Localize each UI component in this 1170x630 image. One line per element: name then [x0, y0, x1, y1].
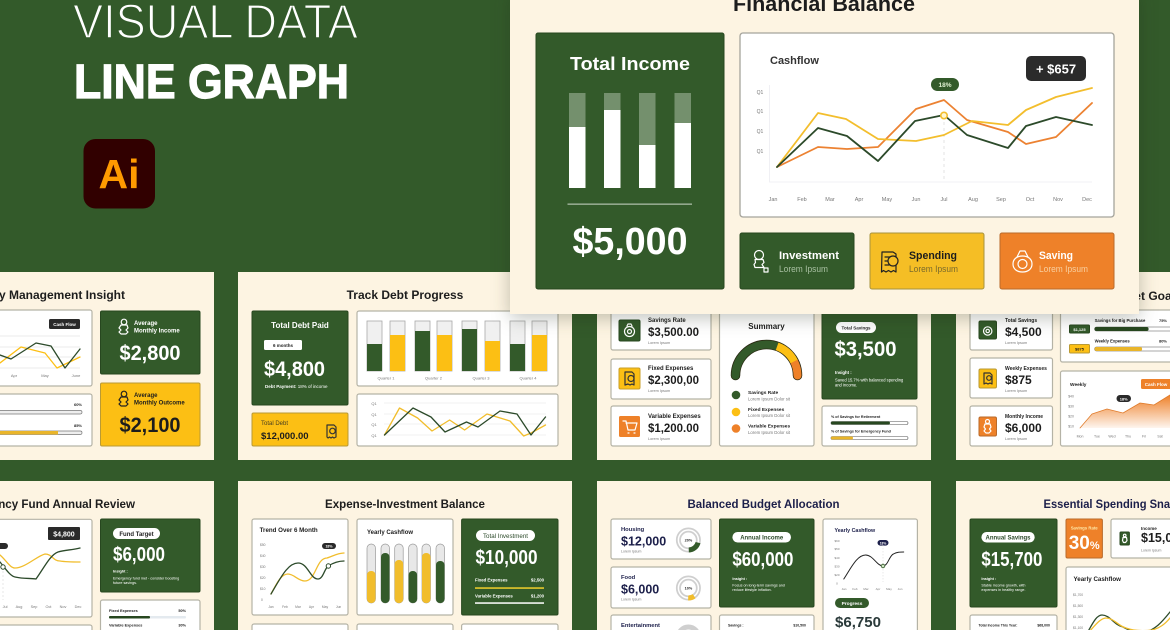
saving card	[1000, 233, 1114, 289]
savings card: Savings :	[728, 624, 744, 628]
gauge legend: Savings Rate	[748, 390, 778, 396]
variable expenses card: $1,200.00	[648, 421, 699, 435]
trend line chart card: $10	[260, 587, 266, 591]
average monthly income card	[100, 311, 200, 374]
monthly income card: Lorem Ipsum	[1005, 437, 1027, 441]
month labels: Sep	[996, 197, 1006, 203]
progress card	[0, 394, 92, 446]
total income card: $68,000	[1037, 624, 1050, 628]
housing card	[611, 519, 711, 559]
food card: 10%	[685, 586, 693, 590]
line chart card: May	[41, 373, 49, 378]
month labels: Jan	[769, 197, 777, 203]
total income card: Total Income	[570, 54, 690, 74]
gauge chart	[736, 344, 798, 376]
trend line chart card: Mar	[295, 605, 302, 609]
cashflow line chart card	[740, 33, 1114, 217]
housing card: $12,000	[621, 534, 666, 548]
food card	[611, 567, 711, 608]
trend line chart card: $20	[260, 576, 266, 580]
month labels: Jul	[940, 197, 948, 203]
area chart card: Thu	[1125, 434, 1131, 438]
total debt paid card: Total Debt Paid	[271, 321, 329, 330]
savings rate card: Savings Rate	[1071, 526, 1098, 530]
icon: saving	[1013, 251, 1032, 272]
average monthly income card: Monthly Income	[134, 328, 180, 334]
month labels: Feb	[797, 197, 807, 203]
goal progress card	[1060, 310, 1170, 362]
savings rate card	[611, 312, 711, 350]
total savings card: Total Savings	[842, 326, 871, 330]
investment card: Lorem Ipsum	[779, 264, 828, 274]
entertainment card: Entertainment	[621, 623, 660, 629]
yearly cashflow capsule bars: Yearly Cashflow	[367, 530, 413, 536]
fixed expenses card: Fixed Expenses	[648, 366, 694, 372]
annual income card	[720, 519, 814, 607]
gauge legend: Lorem Ipsum Dolor sit	[748, 430, 791, 435]
annual income card: Annual Income	[740, 536, 784, 542]
bar chart card: Quarter 3	[473, 376, 490, 380]
yearly cashflow and progress card: Yearly Cashflow	[834, 528, 876, 534]
fixed expenses card	[611, 359, 711, 399]
total savings card: and income.	[835, 382, 857, 388]
annual savings card: Annual Savings	[985, 536, 1031, 542]
chart lines	[777, 88, 1092, 167]
cashflow line chart card: Q1	[757, 90, 764, 96]
variable expenses card: Lorem Ipsum	[648, 437, 670, 441]
gauge legend: Lorem Ipsum Dolor sit	[748, 396, 791, 402]
goal progress card: 75%	[1159, 318, 1167, 323]
line chart card: Nov	[60, 605, 66, 609]
cashflow line chart card: Q1	[757, 149, 764, 155]
trend line chart card: $30	[260, 565, 266, 569]
total debt paid card: Debt Payment: 18% of income	[265, 384, 328, 389]
trend line chart card: 0	[261, 598, 263, 602]
yearly cashflow and progress card: Progress	[842, 601, 863, 607]
trend line chart card: Jun	[336, 605, 341, 609]
area chart card: Cash Flow	[1145, 382, 1168, 387]
savings card: $10,500	[793, 624, 806, 628]
value callout	[1026, 56, 1086, 81]
average monthly income card: Average	[134, 321, 158, 327]
trend line chart card: $40	[260, 554, 266, 558]
month labels: Nov	[1053, 197, 1063, 203]
investment card: Investment	[779, 250, 839, 262]
yearly cashflow chart card	[1066, 567, 1170, 630]
heading: Track Debt Progress	[347, 288, 464, 302]
fund target card: future savings.	[113, 581, 137, 585]
yearly cashflow and progress card: $60	[834, 539, 840, 543]
total savings card: Insight :	[835, 370, 852, 375]
icon: spending	[882, 252, 898, 272]
area chart card: 18%	[1120, 396, 1128, 401]
value callout: + $657	[1036, 62, 1076, 76]
total savings card: Lorem Ipsum	[1005, 341, 1027, 345]
area chart card: $40	[1068, 394, 1074, 398]
goal progress card: $875	[1075, 346, 1085, 352]
month labels: Mar	[825, 197, 835, 203]
line chart card: Sep	[31, 605, 37, 609]
food card: Food	[621, 575, 636, 581]
trend line chart card: Feb	[282, 605, 288, 609]
average monthly outcome card: $2,100	[120, 414, 180, 437]
goal progress card: $1,125	[1073, 327, 1086, 332]
area chart card: Wed	[1108, 434, 1116, 438]
average monthly outcome card: Monthly Outcome	[134, 400, 185, 406]
line chart card: Q1	[371, 412, 377, 417]
total debt paid card	[252, 311, 348, 405]
yearly cashflow and progress card: $50	[834, 547, 840, 551]
panel: track debt progress	[238, 272, 572, 460]
area chart card: Sat	[1157, 434, 1163, 438]
fixed expenses card: $2,300,00	[648, 373, 699, 387]
trend line chart card: Jan	[268, 605, 274, 609]
total investment card: $1,200	[531, 594, 545, 598]
total savings card: $3,500	[834, 338, 896, 361]
yearly cashflow and progress card: Feb	[852, 587, 858, 591]
line chart card: Oct	[46, 605, 52, 609]
line chart card	[0, 519, 92, 617]
total savings card: $4,500	[1005, 325, 1042, 339]
panel: savings summary	[597, 272, 931, 460]
spending card	[870, 233, 984, 289]
line chart card: Apr	[11, 373, 18, 378]
area chart card: Fri	[1142, 434, 1146, 438]
goal progress card: 80%	[1159, 338, 1167, 344]
monthly income card: Monthly Income	[1005, 414, 1043, 420]
spending card: Spending	[909, 250, 957, 262]
lower cards row	[252, 624, 558, 630]
gauge legend	[732, 390, 791, 435]
annual income card: Insight :	[732, 577, 747, 581]
line chart card: Q1	[371, 401, 377, 406]
progress card: 60%	[74, 402, 82, 407]
savings rate card: Savings Rate	[648, 318, 686, 324]
percent pill: 18%	[938, 82, 952, 89]
area chart card: Weekly	[1070, 382, 1087, 388]
total savings card	[970, 312, 1052, 350]
retirement progress card: % of Savings for Emergency Fund	[831, 430, 892, 434]
panel: financial balance	[510, 0, 1139, 314]
area chart card	[1060, 371, 1170, 446]
total investment card: Variable Expenses	[475, 594, 513, 598]
title: line graph: LINE GRAPH	[74, 56, 349, 109]
month labels: May	[882, 197, 892, 203]
summary gauge card	[720, 312, 814, 446]
investment card	[740, 233, 854, 289]
fund target card: $6,000	[113, 544, 165, 566]
income card: Lorem Ipsum	[1141, 548, 1162, 552]
fund target card: Insight :	[113, 570, 128, 574]
annual income card: $60,000	[732, 549, 793, 571]
total debt card: $12,000.00	[261, 431, 309, 442]
heading: Balanced Budget Allocation	[688, 497, 840, 511]
housing card: Lorem Ipsum	[621, 550, 642, 554]
average monthly outcome card: Average	[134, 393, 158, 399]
fund target card: Emergency fund met - consider boosting	[113, 576, 179, 580]
cashflow line chart card: Cashflow	[770, 55, 819, 67]
savings rate card: 30%	[1069, 533, 1100, 554]
savings rate card	[1066, 519, 1102, 558]
savings rate card: Lorem Ipsum	[648, 341, 670, 345]
yearly cashflow and progress card: Jan	[842, 587, 847, 591]
yearly cashflow chart card: $1,700	[1073, 593, 1083, 597]
goal progress card: Weekly Expenses	[1095, 338, 1130, 344]
line chart card: Aug	[16, 605, 22, 609]
goal progress card: Savings for Big Purchase	[1095, 318, 1146, 323]
annual savings card: Insight :	[981, 577, 996, 581]
panel: emergency fund annual review	[0, 481, 214, 630]
percent pill	[931, 78, 959, 91]
bar chart card: Quarter 1	[378, 376, 395, 380]
variable expenses card	[611, 406, 711, 446]
yearly cashflow and progress card: Apr	[876, 587, 880, 591]
trend line chart card	[252, 519, 348, 615]
month labels: Apr	[855, 197, 863, 203]
total income card: $5,000	[572, 221, 688, 263]
variable expenses card: Variable Expenses	[648, 414, 701, 420]
heading: Expense-Investment Balance	[325, 497, 485, 511]
month labels	[769, 197, 1092, 203]
expense breakdown card	[100, 600, 200, 630]
line chart card	[0, 310, 92, 386]
expense breakdown card: Fixed Expenses	[109, 609, 138, 613]
gauge legend: Fixed Expenses	[748, 407, 785, 413]
yearly cashflow chart card: $1,300	[1073, 615, 1083, 619]
annual savings card: Stable income growth, with	[981, 584, 1025, 588]
yearly cashflow and progress card: Jun	[898, 587, 903, 591]
bar chart card: Quarter 2	[425, 376, 443, 380]
month labels: Oct	[1026, 197, 1035, 203]
yearly cashflow chart card: $1,100	[1073, 626, 1083, 630]
line chart card	[357, 394, 558, 446]
total debt card	[252, 413, 348, 446]
line chart card: Cash Flow	[53, 322, 76, 327]
bar chart	[569, 93, 691, 188]
area chart card: $20	[1068, 414, 1074, 418]
weekly expenses card: Lorem Ipsum	[1005, 389, 1027, 393]
saving card: Saving	[1039, 250, 1073, 262]
panel: expense-investment balance	[238, 481, 572, 630]
total debt paid card: $4,800	[264, 358, 325, 381]
annual savings card: $15,700	[981, 549, 1042, 571]
total savings card	[822, 312, 917, 399]
month labels: Aug	[968, 197, 978, 203]
monthly income card	[970, 406, 1052, 446]
fund target card	[100, 519, 200, 592]
total debt paid card: 6 months	[273, 343, 293, 348]
area chart card: $10	[1068, 424, 1074, 428]
annual income card: reduce lifestyle inflation.	[732, 588, 772, 592]
total debt card: Total Debt	[261, 421, 288, 427]
area chart card: Mon	[1077, 434, 1083, 438]
line chart card: Jul	[3, 605, 8, 609]
gauge legend: Variable Expenses	[748, 424, 790, 430]
cashflow line chart card: Q1	[757, 109, 764, 115]
panel: budget goals	[956, 272, 1170, 460]
lower card	[0, 625, 92, 630]
bar chart card	[357, 311, 558, 386]
yearly cashflow and progress card: May	[886, 587, 892, 591]
weekly expenses card: $875	[1005, 373, 1032, 387]
expense breakdown card: 30%	[178, 624, 187, 628]
expense breakdown card: Variable Expenses	[109, 624, 142, 628]
yearly cashflow and progress card: 18%	[880, 541, 886, 545]
total investment card: Total Investment	[483, 533, 528, 540]
food card: Lorem Ipsum	[621, 598, 642, 602]
panel: balanced budget allocation	[597, 481, 931, 630]
income card	[1111, 519, 1170, 558]
annual savings card: expenses in healthy range.	[981, 588, 1025, 592]
yearly cashflow chart card: Yearly Cashflow	[1074, 576, 1121, 583]
bar chart card: Quarter 4	[520, 376, 537, 380]
average monthly income card: $2,800	[120, 342, 180, 365]
weekly expenses card	[970, 358, 1052, 398]
fixed expenses card: Lorem Ipsum	[648, 389, 670, 393]
fund target card: Fund Target	[119, 532, 154, 538]
icon: investment	[754, 250, 768, 272]
retirement progress card: % of Savings for Retirement	[831, 415, 881, 419]
yearly cashflow and progress card: $30	[834, 564, 840, 568]
housing card: Housing	[621, 527, 645, 533]
yearly cashflow capsule bars	[357, 519, 453, 615]
line chart card: Q1	[371, 422, 377, 427]
total investment card: $2,500	[531, 578, 545, 582]
trend line chart card: May	[322, 605, 328, 609]
yearly cashflow chart card: $1,500	[1073, 604, 1083, 608]
food card: $6,000	[621, 582, 659, 596]
total investment card: Fixed Expenses	[475, 578, 508, 582]
yearly cashflow and progress card	[823, 519, 917, 630]
savings rate card: $3,500.00	[648, 325, 699, 339]
line chart card: Q1	[371, 433, 377, 438]
panel: money management insight	[0, 272, 214, 460]
yearly cashflow and progress card: Mar	[863, 587, 869, 591]
expense breakdown card: 50%	[178, 609, 187, 613]
summary gauge card: Summary	[748, 322, 785, 331]
trend line chart card: $50	[260, 543, 266, 547]
total investment card: $10,000	[476, 547, 538, 569]
yearly cashflow and progress card: 0	[836, 582, 838, 586]
total savings card: Saved 15.7% with balanced spending	[835, 378, 904, 382]
icon: adobe illustrator logo	[84, 139, 155, 208]
weekly expenses card: Weekly Expenses	[1005, 366, 1047, 372]
saving card: Lorem Ipsum	[1039, 264, 1088, 274]
annual savings card	[970, 519, 1057, 607]
line chart card: $4,800	[53, 532, 75, 538]
area chart card: $30	[1068, 404, 1074, 408]
icon: adobe illustrator logo: Ai	[98, 151, 140, 197]
yearly cashflow and progress card: $20	[834, 573, 840, 577]
trend line chart card: 18%	[325, 544, 333, 548]
month labels: Dec	[1082, 197, 1092, 203]
total income card: Total Income This Year:	[978, 624, 1017, 628]
monthly income card: $6,000	[1005, 421, 1042, 435]
income card: Income	[1141, 526, 1157, 531]
line chart card: June	[72, 373, 81, 378]
annual income card: Focus on long-term savings and	[732, 584, 785, 588]
trend line chart card: Apr	[309, 605, 315, 609]
trend line chart card: Trend Over 6 Month	[260, 527, 318, 534]
area chart card: Tue	[1094, 434, 1100, 438]
entertainment card	[611, 615, 711, 630]
total savings card: Total Savings	[1005, 318, 1037, 324]
month labels: Jun	[912, 197, 920, 203]
total income card	[970, 615, 1057, 630]
cashflow line chart card: Q1	[757, 129, 764, 135]
panel: essential spending snapshot	[956, 481, 1170, 630]
spending card: Lorem Ipsum	[909, 264, 958, 274]
average monthly outcome card	[100, 383, 200, 446]
total income card	[536, 33, 724, 289]
progress card: 85%	[74, 423, 82, 428]
savings card	[720, 615, 814, 630]
yearly cashflow and progress card: $40	[834, 556, 840, 560]
housing card: 20%	[685, 538, 693, 542]
gauge legend: Lorem Ipsum Dolor sit	[748, 413, 791, 418]
retirement progress card	[822, 406, 917, 446]
line chart card: Dec	[75, 605, 81, 609]
total investment card	[462, 519, 558, 615]
